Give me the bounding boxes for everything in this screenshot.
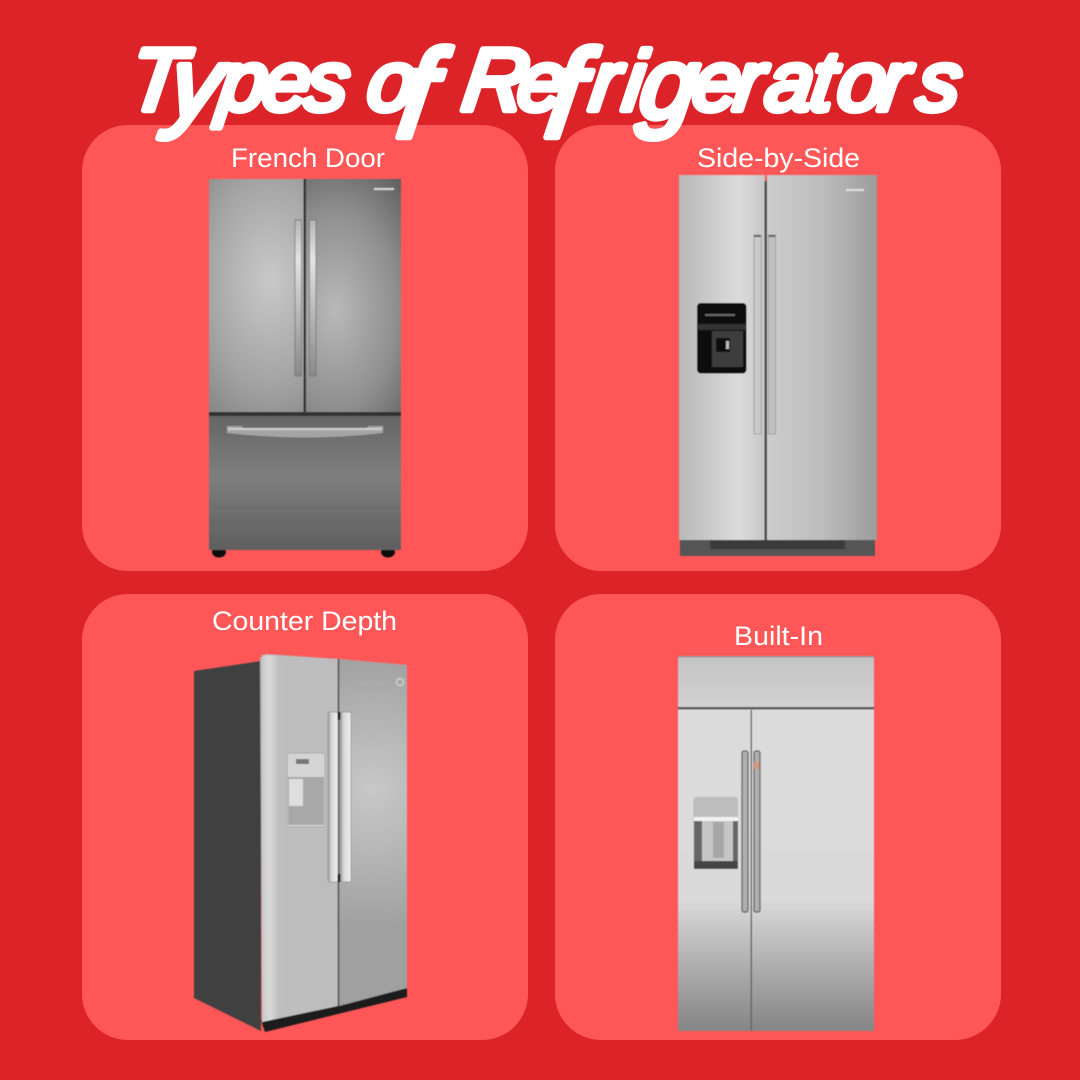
title: a — [761, 34, 820, 128]
panel: Counter Depth — [82, 594, 528, 1040]
title: f — [538, 24, 604, 164]
panel: French Door — [82, 125, 528, 571]
label: Built-In: Built-In — [734, 621, 823, 651]
title: T — [123, 30, 197, 129]
title: e — [688, 34, 747, 128]
icon: door handles — [742, 751, 760, 912]
fridge: Counter Depth — [194, 654, 407, 1032]
title: g — [634, 28, 705, 140]
title: s — [301, 34, 356, 128]
label: Counter Depth: Counter Depth — [212, 606, 397, 636]
fridge: Side-by-Side — [679, 175, 877, 556]
icon: water dispenser — [287, 753, 325, 827]
title: r — [875, 34, 919, 128]
panel: Side-by-Side — [555, 125, 1001, 571]
label: French Door: French Door — [231, 143, 385, 173]
title: R — [457, 30, 535, 129]
title: e — [258, 34, 317, 128]
fridge: French Door — [209, 179, 401, 558]
title: o — [363, 34, 422, 128]
panel: Built-In — [555, 594, 1001, 1040]
icon: water dispenser — [694, 797, 738, 869]
title: r — [730, 34, 774, 128]
title: y — [158, 28, 235, 140]
title: s — [913, 34, 968, 128]
title: r — [586, 34, 630, 128]
title: i — [619, 34, 653, 128]
icon: door handles — [328, 712, 351, 882]
icon: water dispenser — [697, 303, 746, 374]
title: o — [833, 34, 892, 128]
title: t — [806, 34, 846, 128]
title: e — [513, 34, 572, 128]
fridge: Built-In — [678, 656, 874, 1031]
label: Side-by-Side: Side-by-Side — [697, 143, 860, 173]
title: f — [390, 24, 456, 164]
title: p — [212, 34, 274, 128]
